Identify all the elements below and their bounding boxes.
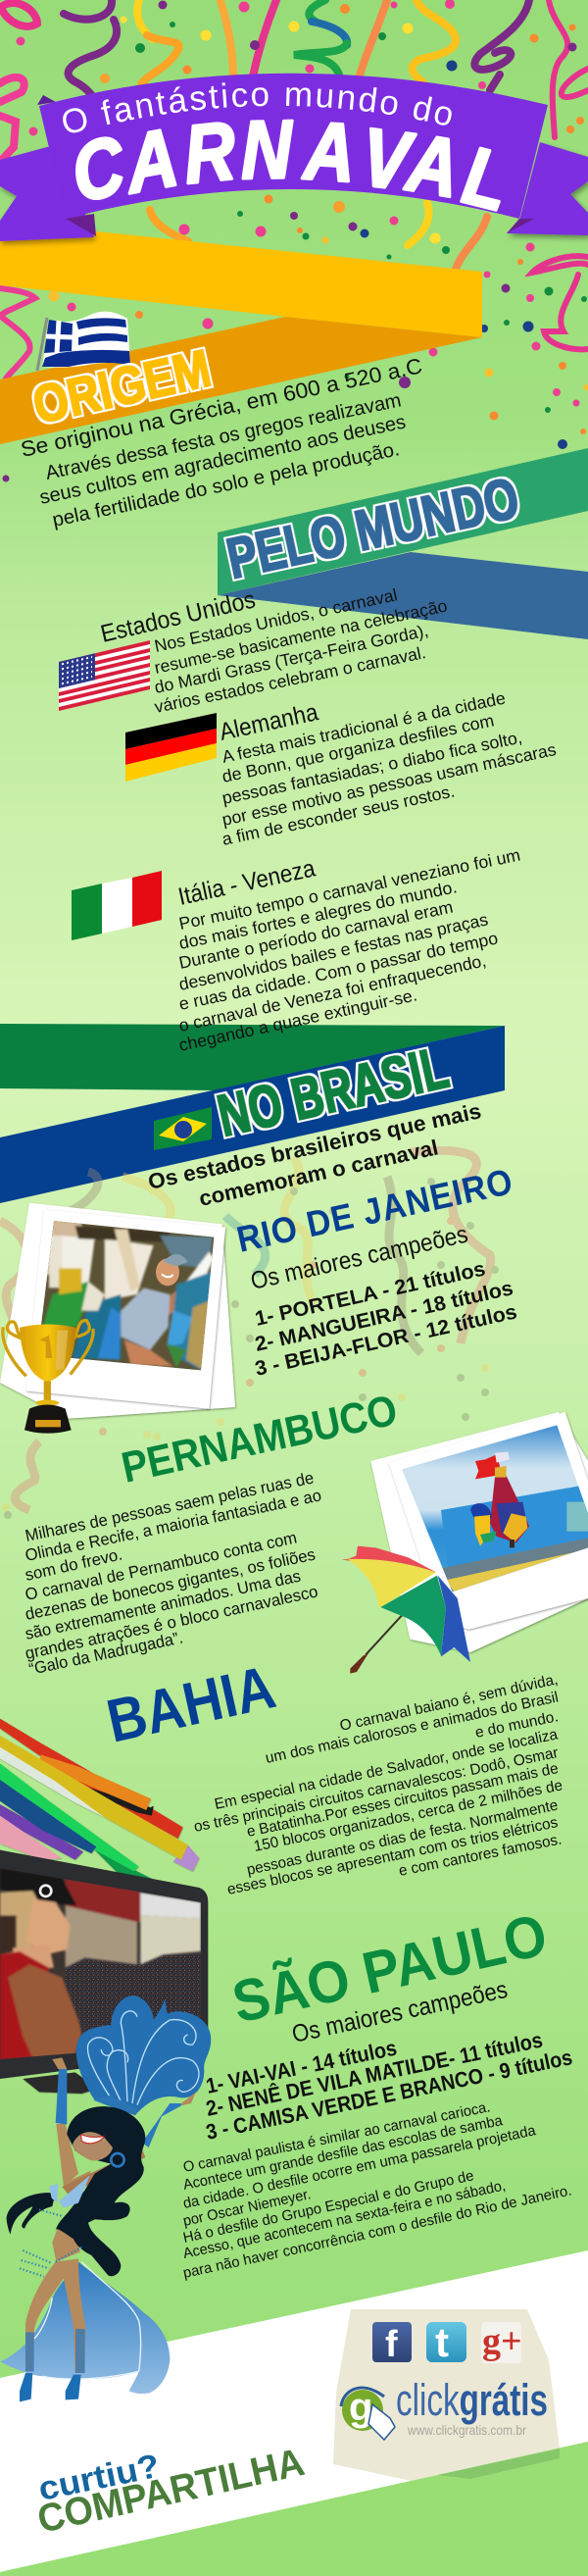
- logo: clickgratis: clickgrátis: [396, 2375, 548, 2425]
- text: bahia: e Batatinha.Por esses circuitos passam mais de: [245, 1760, 560, 1841]
- text: pernambuco: grandes atrações é o bloco carnavalesco: [24, 1582, 319, 1663]
- logo: clickgratis: [341, 2375, 548, 2440]
- section: estados unidos: [59, 584, 449, 717]
- text: sao paulo champions: Os maiores campeões: [289, 1976, 510, 2048]
- text: pernambuco: Milhares de pessoas saem pelas ruas de: [24, 1468, 316, 1545]
- text: sao paulo: Acontece um grande desfile das escolas de samba: [181, 2112, 505, 2194]
- panel: share: [0, 2309, 588, 2576]
- text: bahia: os três principais circuitos carnavalescos: Dodô, Osmar: [192, 1744, 560, 1836]
- heading: bahia: BAHIA: [101, 1653, 281, 1756]
- photo: samba dancer: [41, 1221, 214, 1371]
- section: alemanha: por esse motivo as pessoas usam máscaras: [220, 739, 558, 830]
- tv picture: [0, 1866, 209, 2062]
- heading: sao paulo: SÃO PAULO: [226, 1901, 553, 2036]
- skirt: [0, 2262, 170, 2394]
- text: bahia: Em especial na cidade de Salvador, onde se localiza: [213, 1726, 560, 1813]
- heading: NO BRASIL: NO BRASIL: [212, 1035, 454, 1149]
- yellow ribbon: [0, 222, 482, 337]
- icon: trophy: [3, 1321, 93, 1434]
- text: sao paulo: Há o desfile do Grupo Especial e do Grupo de: [181, 2167, 475, 2247]
- ribbon: no brasil: [0, 1024, 505, 1203]
- text: pernambuco: “Galo da Madrugada”.: [27, 1628, 184, 1679]
- icon: twitter: [426, 2319, 466, 2365]
- text: rio champions: 1- PORTELA - 21 títulos: [253, 1257, 487, 1331]
- face: [73, 2132, 113, 2160]
- icon: italy flag: [72, 871, 162, 940]
- logo: clickgratis: g: [349, 2386, 372, 2429]
- text: sao paulo champions: 2- NENÊ DE VILA MATILDE- 11 títulos: [204, 2027, 545, 2121]
- text: sao paulo champions: 1- VAI-VAI - 14 títulos: [204, 2036, 399, 2098]
- text: curtiu: curtiu?: [35, 2448, 163, 2508]
- text: italia lower lines: o carnaval de Veneza foi enfraquecendo,: [177, 950, 488, 1035]
- crown: [93, 2096, 137, 2115]
- text: sao paulo: O carnaval paulista é similar ao carnaval carioca.: [181, 2098, 492, 2176]
- text: rio champions: 2- MANGUEIRA - 18 títulos: [253, 1277, 515, 1356]
- title: CARNAVAL: CARNAVAL: [65, 102, 514, 229]
- icon: greek flag: [37, 312, 130, 371]
- text: pernambuco: O carnaval de Pernambuco conta com: [24, 1528, 299, 1604]
- text: origem: pela fertilidade do solo e pela produção.: [51, 438, 402, 531]
- section: estados unidos: do Mardi Grass (Terça-Feira Gorda),: [153, 621, 430, 697]
- text: origem: seus cultos em agradecimento aos deuses: [38, 411, 408, 509]
- text: bahia: O carnaval baiano é, sem dúvida,: [338, 1671, 560, 1735]
- feather headdress: [76, 1995, 211, 2115]
- gloves: [56, 2069, 181, 2147]
- section: estados unidos: vários estados celebram o carnaval.: [153, 642, 427, 717]
- photo: galo polaroid: [370, 1412, 588, 1652]
- heading: pernambuco: PERNAMBUCO: [118, 1386, 402, 1492]
- section: italia: Por muito tempo o carnaval veneziano foi um: [177, 845, 522, 934]
- text: bahia: 150 blocos organizados, cerca de 2 milhões de: [252, 1777, 564, 1855]
- heading: rio de janeiro: RIO DE JANEIRO: [233, 1161, 516, 1260]
- text: origem: [19, 353, 424, 531]
- text: pernambuco: som do frevo.: [24, 1544, 123, 1585]
- text: compartilha: COMPARTILHA: [33, 2441, 308, 2542]
- section: estados unidos: Nos Estados Unidos, o carnaval: [153, 584, 399, 656]
- text: bahia: [192, 1671, 564, 1898]
- text: bahia: pessoas durante os dias de festa. Normalmente: [245, 1796, 560, 1879]
- text: bahia: e do mundo.: [473, 1708, 560, 1742]
- section: italia: e ruas da cidade. Com o passar do tempo: [177, 928, 500, 1014]
- section: estados unidos: Estados Unidos: [98, 585, 258, 648]
- text: estados brasileiros: comemoram o carnaval: [197, 1135, 440, 1211]
- icon: germany flag: [125, 713, 217, 782]
- icon: facebook: [372, 2322, 412, 2365]
- heading: ORIGEM: ORIGEM: [28, 339, 216, 435]
- bikini: [49, 2175, 90, 2208]
- text: bahia: e com cantores famosos.: [397, 1831, 564, 1880]
- text: rio champions: Os maiores campeões: [248, 1221, 470, 1295]
- icon: facebook: f: [385, 2324, 398, 2365]
- text: pernambuco: dezenas de bonecos gigantes, os foliões: [24, 1545, 317, 1624]
- section: alemanha: Alemanha: [217, 698, 320, 746]
- decorative faded confetti: [0, 1150, 499, 1519]
- shoes: [20, 2373, 81, 2401]
- text: rio champions: [248, 1221, 519, 1381]
- icon: usa flag: [59, 640, 150, 711]
- footer green band: [0, 2442, 588, 2576]
- text: sao paulo: por Oscar Niemeyer.: [181, 2186, 313, 2230]
- logo: clickgratis: www.clickgratis.com.br: [407, 2422, 526, 2438]
- text: pernambuco: Olinda e Recife, a maioria fantasiada e ao: [24, 1486, 323, 1565]
- wristbands: [0, 1719, 199, 1881]
- title banner: [0, 73, 588, 247]
- streamers: top: [0, 0, 588, 379]
- section: italia: Durante o período do carnaval eram: [177, 897, 455, 973]
- text: origem: Através dessa festa os gregos realizavam: [44, 389, 403, 484]
- earring: [111, 2153, 124, 2166]
- text: sao paulo: para não haver concorrência com o desfile do Rio de Janeiro.: [181, 2182, 573, 2282]
- text: bahia: esses blocos se apresentam com os trios elétricos: [225, 1814, 560, 1898]
- icon: google plus: g+: [482, 2321, 522, 2362]
- title: O fantástico mundo do: O fantástico mundo do: [63, 82, 452, 133]
- text: estados brasileiros: Os estados brasileiros que mais: [146, 1098, 483, 1194]
- section: italia: [72, 845, 522, 1014]
- text: rio champions: 3 - BEIJA-FLOR - 12 títulos: [253, 1300, 519, 1381]
- text: sao paulo: Acesso, que acontecem na sexta-feira e no sábado,: [181, 2177, 507, 2262]
- hair: [56, 2106, 145, 2276]
- section: italia: Itália - Veneza: [175, 854, 318, 911]
- text: origem: Se originou na Grécia, em 600 a 520 a.C: [19, 353, 424, 462]
- illustration: dancer: [0, 1995, 211, 2401]
- photo: rooster: [399, 1425, 588, 1595]
- text: pernambuco: são extremamente animados. Uma das: [24, 1567, 303, 1643]
- confetti dots: [2, 0, 588, 482]
- icon: frevo umbrella: [341, 1546, 470, 1674]
- section: alemanha: a fim de esconder seus rostos.: [220, 781, 457, 849]
- white band: [0, 2250, 588, 2572]
- section: italia: dos mais fortes e alegres do mundo.: [177, 877, 459, 953]
- text: sao paulo champions: [204, 1976, 574, 2145]
- text: bahia: um dos mais calorosos e animados do Brasil: [264, 1689, 560, 1767]
- beads: [20, 2209, 81, 2277]
- icon: brazil flag: [154, 1107, 212, 1150]
- text: italia lower lines: chegando a quase extinguir-se.: [177, 985, 418, 1055]
- section: italia: desenvolvidos bailes e festas nas praças: [177, 909, 490, 994]
- photo: rio polaroid: [0, 1203, 235, 1419]
- text: sao paulo: [181, 2098, 573, 2282]
- section: alemanha: A festa mais tradicional é a da cidade: [220, 688, 507, 767]
- body: [52, 2170, 91, 2262]
- text: pernambuco: [24, 1468, 323, 1679]
- legs: [25, 2258, 85, 2373]
- section: estados unidos: resume-se basicamente na celebração: [153, 595, 449, 678]
- section: alemanha: [125, 688, 558, 849]
- ribbon: pelo mundo: [218, 448, 588, 639]
- orange fold of origem ribbon: [0, 317, 482, 444]
- icon: twitter: t: [435, 2319, 449, 2365]
- text: sao paulo: da cidade. O desfile ocorre em uma passarela projetada: [181, 2122, 538, 2212]
- tv screen: [0, 1850, 209, 2094]
- section: alemanha: pessoas fantasiadas; o diabo fica solto,: [220, 728, 523, 808]
- section: alemanha: de Bonn, que organiza desfiles com: [220, 710, 496, 786]
